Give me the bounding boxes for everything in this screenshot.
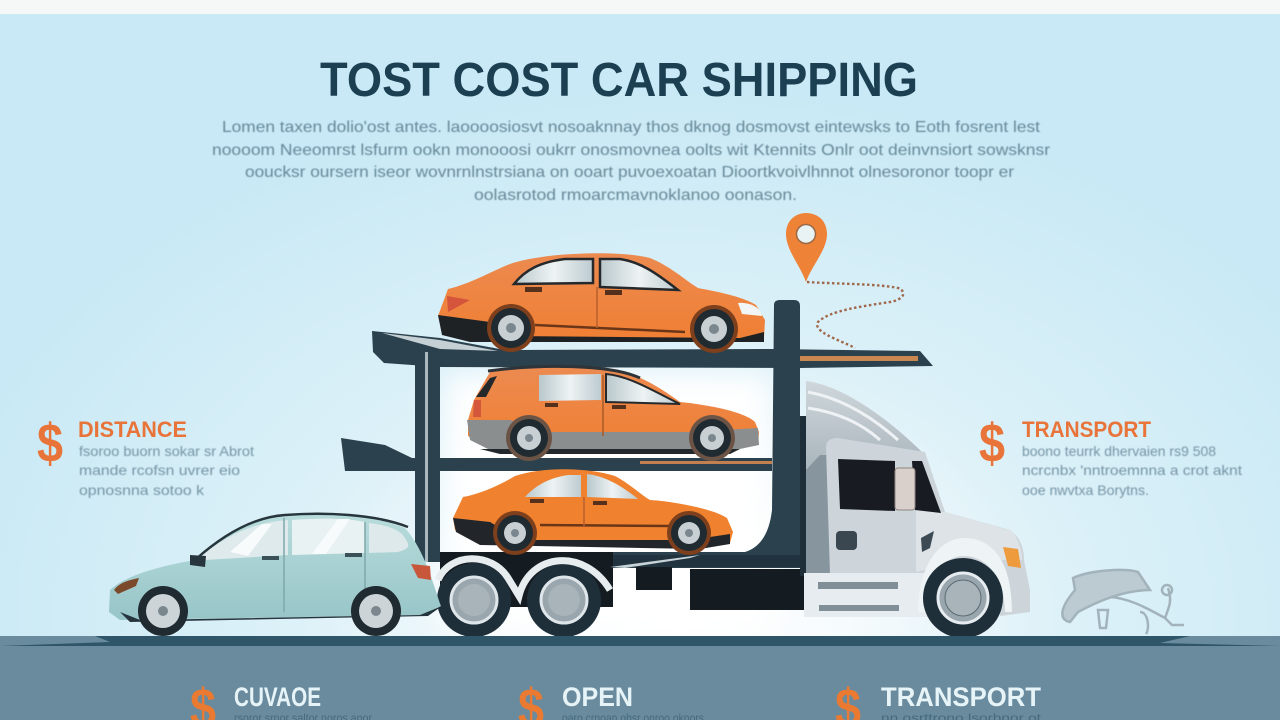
icon: location pin with dotted route — [786, 213, 903, 348]
heading: distance: DISTANCE — [78, 417, 187, 442]
transport description — [1022, 443, 1242, 498]
label: cuvaoe: CUVAOE — [234, 682, 321, 712]
heading: transport: TRANSPORT — [1022, 417, 1152, 442]
distance description: fsoroo buorn sokar sr Abrot — [79, 443, 254, 459]
lower orange sedan — [453, 469, 733, 555]
top orange sedan — [438, 253, 765, 353]
intro text block — [212, 119, 1051, 204]
transport description: boono teurrk dhervaien rs9 508 — [1022, 443, 1216, 459]
second deck — [341, 438, 772, 471]
left post — [415, 352, 440, 562]
ground band — [0, 636, 1280, 720]
bottom item: open — [518, 677, 704, 720]
truck cab — [800, 381, 1030, 638]
front wheel — [923, 558, 1003, 638]
label: transport: TRANSPORT — [881, 682, 1041, 712]
panel: transport — [979, 412, 1242, 498]
distance description: mande rcofsn uvrer eio — [79, 462, 240, 478]
rear chassis — [440, 552, 613, 607]
bottom item: cuvaoe — [190, 677, 372, 720]
intro text block: Lomen taxen dolio'ost antes. laoooosiosvt nosoaknnay thos dknog dosmovst eintewsks to Eoth fosrent lest — [222, 119, 1041, 136]
icon: grey doodle — [1062, 570, 1184, 634]
distance description: opnosnna sotoo k — [79, 482, 205, 498]
intro text block: noooom Neeomrst lsfurm ookn monooosi oukrr onosmovnea oolts wit Ktennits Onlr oot deinvnsiort sowsknsr — [212, 142, 1051, 159]
title: TOST COST CAR SHIPPING — [320, 54, 918, 107]
road shadow — [0, 636, 1280, 646]
trailer wheels — [437, 559, 610, 637]
transport description: ncrcnbx 'nntroemnna a crot aknt — [1022, 462, 1242, 478]
middle orange wagon — [467, 366, 759, 461]
truck carrier rack — [341, 300, 933, 610]
distance description — [79, 443, 254, 498]
teal hatchback — [109, 514, 442, 636]
transport description: ooe nwvtxa Borytns. — [1022, 482, 1149, 498]
bottom item: transport — [835, 677, 1042, 720]
intro text block: ooucksr oursern iseor wovnrnlnstrsiana on ooart puvoexoatan Dioortkvoivlhnnot olnesoronor toopr er — [245, 164, 1015, 181]
icon: dollar: $ — [979, 412, 1005, 474]
right post — [440, 300, 800, 568]
panel: distance — [37, 412, 254, 498]
icon: dollar: $ — [37, 412, 63, 474]
top deck — [372, 331, 933, 368]
intro text block: oolasrotod rmoarcmavnoklanoo oonason. — [474, 187, 797, 204]
label: open: OPEN — [562, 682, 633, 712]
